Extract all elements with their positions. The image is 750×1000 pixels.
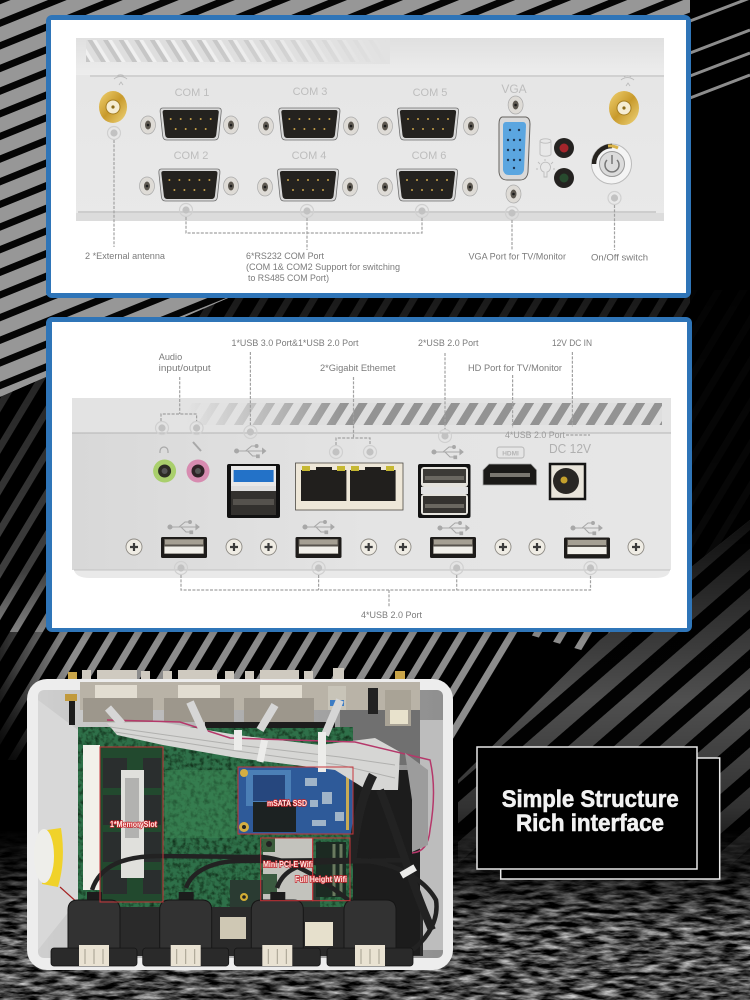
COM port labels: COM 4 <box>292 150 326 162</box>
device rear case <box>76 38 664 221</box>
COM port labels <box>174 86 447 162</box>
callout labels: DC 12V <box>549 441 591 456</box>
callout labels: VGA Port for TV/Monitor <box>468 252 566 262</box>
ribbon cables <box>107 700 434 853</box>
DC power jack <box>550 464 585 499</box>
COM port labels: COM 2 <box>174 150 208 162</box>
heading text <box>502 786 679 837</box>
icon: yellow battery <box>34 828 80 905</box>
callout labels: 12V DC IN <box>552 338 592 349</box>
icon: right antenna connector <box>609 76 639 125</box>
memory module <box>100 747 163 902</box>
callout labels: 2*Gigabit Ethemet <box>320 363 396 374</box>
callout labels: HD Port for TV/Monitor <box>468 363 562 374</box>
top connector protrusions <box>68 668 405 682</box>
panel: rear ports with USB and Ethernet <box>46 317 692 632</box>
HDMI port: HDMI <box>502 450 519 458</box>
Ethernet ports <box>296 463 403 510</box>
red component callouts: Mini PCI-E Wifi <box>263 860 313 869</box>
USB 2.0 stack <box>418 446 470 518</box>
metal case <box>27 679 453 970</box>
rear connector row <box>65 682 420 728</box>
callout labels: 1*USB 3.0 Port&1*USB 2.0 Port <box>232 338 359 349</box>
red component callouts: mSATA SSD <box>267 799 307 808</box>
mSATA SSD <box>238 767 353 834</box>
red component callouts <box>100 747 353 902</box>
callout labels: Audio <box>159 352 182 363</box>
COM ports with screws <box>140 108 478 201</box>
callout labels: input/output <box>159 363 211 374</box>
callout labels: On/Off switch <box>591 252 648 264</box>
heading text: Simple Structure <box>502 786 679 813</box>
callout labels: 2 *External antenna <box>85 251 166 262</box>
callout labels: 6*RS232 COM Port <box>246 251 324 262</box>
VGA port <box>499 82 530 203</box>
title box <box>477 747 720 879</box>
COM port labels: COM 1 <box>175 87 209 99</box>
cable ties <box>234 730 417 878</box>
red component callouts: Full Height Wifi <box>295 875 347 884</box>
COM port labels: COM 6 <box>412 150 446 162</box>
COM port labels: COM 3 <box>293 86 327 98</box>
wifi card and height slot <box>263 838 346 900</box>
COM port labels: COM 5 <box>413 87 447 99</box>
VGA port: VGA <box>501 82 527 96</box>
HDMI port <box>483 447 537 485</box>
callout labels: (COM 1& COM2 Support for switching <box>246 262 400 273</box>
callout dots and dashed leaders <box>156 352 597 607</box>
panel: rear ports with COM and VGA <box>46 15 691 298</box>
callout labels <box>159 338 592 621</box>
heading text: Rich interface <box>516 810 664 837</box>
callout labels <box>85 251 648 284</box>
icon: left antenna connector <box>99 75 127 123</box>
motherboard <box>78 727 353 946</box>
on/off switch <box>592 144 632 184</box>
photo: open mini PC interior <box>27 668 453 970</box>
lower USB ports <box>161 521 610 558</box>
black antenna cables <box>92 775 437 950</box>
USB 3.0 and USB 2.0 stack <box>227 445 280 518</box>
callout labels: 4*USB 2.0 Port <box>361 610 422 621</box>
device case <box>72 398 671 578</box>
callout labels: 4*USB 2.0 Port <box>505 430 565 441</box>
audio jacks <box>153 442 210 482</box>
USB plug housings <box>51 892 413 966</box>
callout labels: to RS485 COM Port) <box>248 273 329 284</box>
case screws <box>126 539 644 555</box>
status LEDs with icons <box>536 138 574 188</box>
red component callouts: 1*MemorySlot <box>110 820 157 829</box>
callout dots and dashed leaders <box>108 126 621 250</box>
callout labels: 2*USB 2.0 Port <box>418 338 479 349</box>
